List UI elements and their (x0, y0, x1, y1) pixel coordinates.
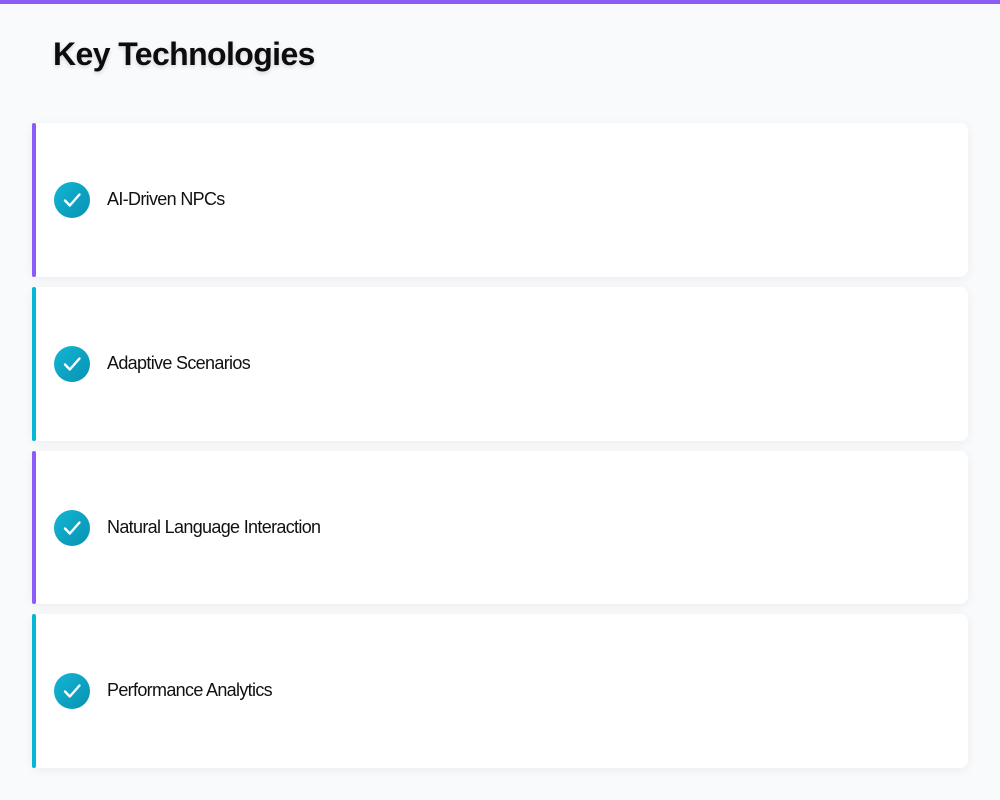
label: AI-Driven NPCs (107, 189, 225, 209)
title: Key Technologies (53, 36, 315, 72)
label: Natural Language Interaction (107, 516, 320, 536)
label: Performance Analytics (107, 680, 272, 700)
icon: check circle (54, 182, 90, 218)
panel: Performance Analytics (32, 614, 968, 768)
panel: Natural Language Interaction (32, 450, 968, 604)
panel: Adaptive Scenarios (32, 287, 968, 440)
icon: check circle (54, 673, 90, 709)
top accent bar (0, 0, 1000, 4)
accent bar: purple (32, 450, 36, 604)
label: Adaptive Scenarios (107, 353, 250, 373)
panel: AI-Driven NPCs (32, 123, 968, 277)
accent bar: cyan (32, 287, 36, 440)
accent bar: purple (32, 123, 36, 277)
accent bar: cyan (32, 614, 36, 768)
icon: check circle (54, 346, 90, 382)
icon: check circle (54, 510, 90, 546)
